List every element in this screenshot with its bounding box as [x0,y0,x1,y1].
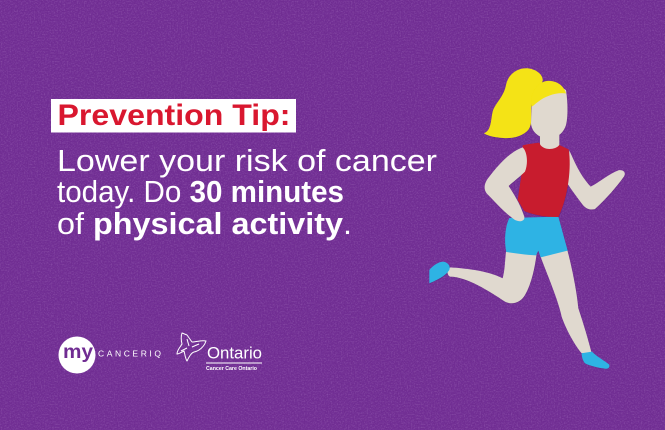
text block: tip message: today. Do 30 minutes [57,174,344,209]
ponytail hair [484,68,543,138]
neck [540,134,559,150]
far arm [567,151,625,210]
head [531,87,567,139]
logo: Ontario trillium: Cancer Care Ontario [206,366,257,372]
front hair [531,81,566,107]
text block: tip message: Lower your risk of cancer [57,143,437,178]
back leg and knee [448,252,537,303]
shorts [505,217,568,257]
text block: tip message: of physical activity . [57,206,352,241]
logo: myCancerIQ: my [63,342,93,363]
near arm [485,147,527,221]
tank top [518,143,570,217]
logo: myCancerIQ: CANCERIQ [98,348,161,358]
heading: Prevention Tip: Prevention Tip: [58,99,290,132]
shoe back [429,262,450,283]
shoe front [582,352,609,369]
text block: tip message [57,143,437,241]
logo: Ontario trillium: Ontario [207,344,262,362]
front leg [540,250,592,353]
logo: myCancerIQ [58,336,161,374]
logo: Ontario trillium [177,333,262,372]
illustration: felt runner [429,68,625,369]
